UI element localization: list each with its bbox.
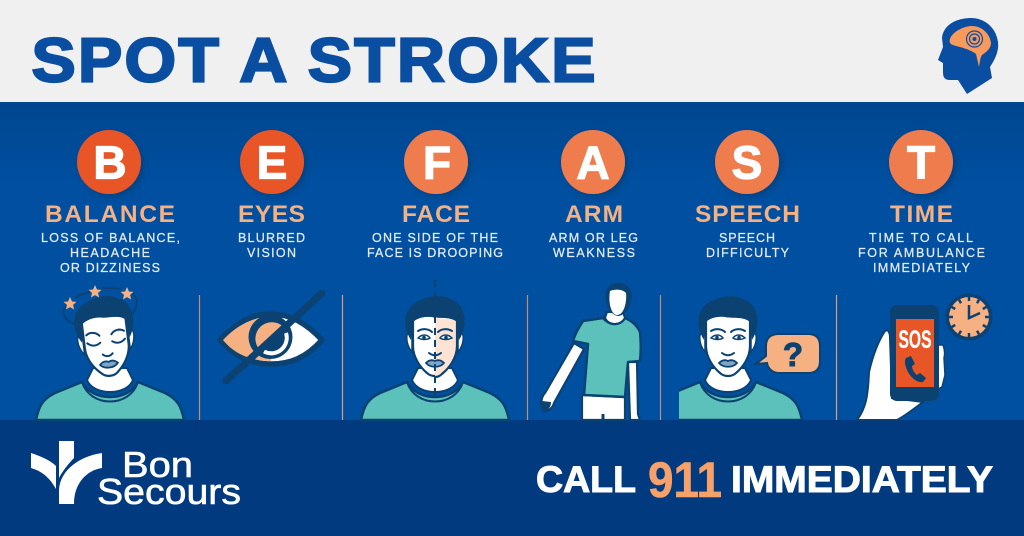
description balance bbox=[41, 231, 180, 275]
icon: clock bbox=[946, 294, 992, 340]
description arm: WEAKNESS bbox=[553, 246, 635, 260]
description speech: SPEECH bbox=[719, 231, 775, 245]
column: arm bbox=[541, 130, 641, 420]
call to action: 911 bbox=[648, 452, 722, 508]
logo wordmark: Secours bbox=[97, 471, 241, 512]
logo wordmark bbox=[97, 444, 241, 512]
description eyes: BLURRED bbox=[238, 231, 305, 245]
letter circle A: A bbox=[576, 136, 610, 188]
letter circle F: F bbox=[423, 136, 451, 188]
main blue panel bbox=[0, 102, 1024, 420]
column: eyes bbox=[220, 130, 322, 381]
heading face: FACE bbox=[402, 201, 470, 228]
column: face bbox=[361, 130, 509, 420]
heading speech: SPEECH bbox=[695, 201, 800, 228]
icon: telephone handset bbox=[905, 356, 926, 382]
icon: hand holding phone bbox=[857, 305, 945, 420]
icon: head with brain target bbox=[938, 18, 998, 94]
description arm bbox=[549, 231, 638, 260]
letter circle B bbox=[77, 130, 141, 194]
star bbox=[89, 285, 102, 298]
footer band bbox=[0, 420, 1024, 536]
star bbox=[121, 287, 134, 300]
column: time bbox=[857, 130, 992, 420]
icon: crossed out eye bbox=[220, 293, 322, 381]
call to action: CALL bbox=[536, 459, 636, 500]
column: balance bbox=[36, 130, 184, 420]
star bbox=[64, 297, 76, 310]
description balance: OR DIZZINESS bbox=[60, 261, 160, 275]
letter circle F bbox=[404, 130, 468, 194]
description time: FOR AMBULANCE bbox=[858, 246, 985, 260]
heading time: TIME bbox=[890, 201, 953, 228]
description time: TIME TO CALL bbox=[869, 231, 973, 245]
call to action: IMMEDIATELY bbox=[731, 459, 993, 500]
letter circle S bbox=[715, 130, 779, 194]
speech bubble with question mark bbox=[756, 334, 820, 373]
title: SPOT A STROKE bbox=[32, 25, 595, 95]
letter circle E bbox=[240, 130, 304, 194]
call to action bbox=[536, 452, 993, 508]
icon: man with drooping face bbox=[361, 280, 509, 420]
description eyes bbox=[238, 231, 305, 260]
description arm: ARM OR LEG bbox=[549, 231, 638, 245]
logo: Bon Secours bbox=[31, 441, 241, 512]
heading arm: ARM bbox=[565, 201, 623, 228]
description balance: LOSS OF BALANCE, bbox=[41, 231, 180, 245]
icon: man with speech difficulty bbox=[679, 296, 821, 420]
logo wordmark: Bon bbox=[122, 444, 193, 485]
column: speech bbox=[679, 130, 821, 420]
description time bbox=[858, 231, 985, 275]
letter circle E: E bbox=[257, 136, 287, 188]
description face: ONE SIDE OF THE bbox=[372, 231, 498, 245]
letter circle B: B bbox=[93, 136, 127, 188]
description time: IMMEDIATELY bbox=[873, 261, 971, 275]
letter circle A bbox=[561, 130, 625, 194]
icon: hand holding phone: SOS bbox=[898, 326, 932, 354]
description face: FACE IS DROOPING bbox=[367, 246, 503, 260]
letter circle T: T bbox=[907, 136, 935, 188]
icon: dizzy man with stars bbox=[36, 285, 184, 420]
heading balance: BALANCE bbox=[45, 201, 175, 228]
heading eyes: EYES bbox=[238, 201, 305, 228]
letter circle T bbox=[889, 130, 953, 194]
description balance: HEADACHE bbox=[70, 246, 150, 260]
letter circle S: S bbox=[732, 136, 762, 188]
description eyes: VISION bbox=[247, 246, 296, 260]
description face bbox=[367, 231, 503, 260]
icon: man with weak arm bbox=[541, 283, 641, 420]
description speech: DIFFICULTY bbox=[706, 246, 790, 260]
header band bbox=[0, 0, 1024, 103]
speech bubble with question mark: ? bbox=[783, 336, 803, 373]
logo mark bbox=[31, 441, 102, 504]
description speech bbox=[706, 231, 790, 260]
